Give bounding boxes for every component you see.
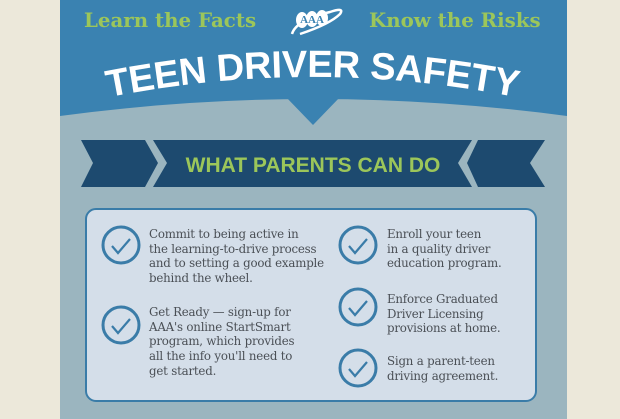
text: commit: the learning-to-drive process xyxy=(149,242,316,256)
text: enforce: provisions at home. xyxy=(387,321,500,335)
title: TEEN DRIVER SAFETY xyxy=(104,50,521,96)
text: sign xyxy=(387,354,498,383)
text: sign: Sign a parent-teen xyxy=(387,354,495,368)
text: enroll: education program. xyxy=(387,256,502,270)
text: get ready: program, which provides xyxy=(149,334,294,348)
text: enroll: Enroll your teen xyxy=(387,227,481,241)
text: get ready: get started. xyxy=(149,364,216,378)
text: get ready xyxy=(148,305,294,378)
text: commit xyxy=(149,227,324,285)
icon: AAA logo: AAA xyxy=(300,14,324,26)
banner xyxy=(81,140,545,187)
text: get ready: all the info you'll need to xyxy=(149,349,292,363)
text: enforce: Enforce Graduated xyxy=(387,292,498,306)
panel xyxy=(86,209,536,401)
icon: AAA logo xyxy=(292,10,341,34)
text: commit: behind the wheel. xyxy=(149,271,253,285)
text: commit: and to setting a good example xyxy=(149,256,324,270)
text: enforce xyxy=(387,292,500,335)
text: enforce: Driver Licensing xyxy=(387,307,483,321)
banner: WHAT PARENTS CAN DO xyxy=(186,154,440,177)
text: commit: Commit to being active in xyxy=(149,227,298,241)
text: sign: driving agreement. xyxy=(387,369,498,383)
header: know the risks: Know the Risks xyxy=(369,8,541,32)
text: enroll xyxy=(387,227,502,270)
text: enroll: in a quality driver xyxy=(387,242,490,256)
check icons xyxy=(103,227,376,386)
header: learn the facts: Learn the Facts xyxy=(84,8,256,32)
text: get ready: Get Ready — sign-up for xyxy=(149,305,291,319)
text: get ready: AAA's online StartSmart xyxy=(149,320,290,334)
pointer triangle xyxy=(285,96,341,125)
